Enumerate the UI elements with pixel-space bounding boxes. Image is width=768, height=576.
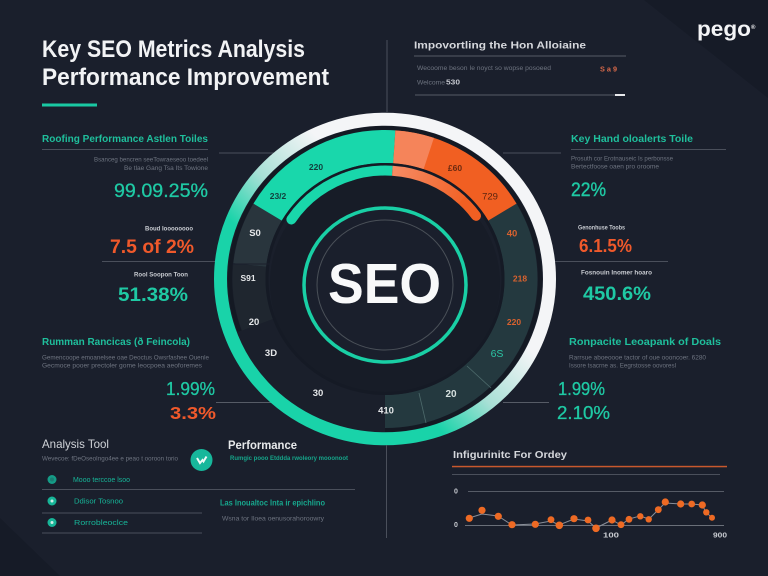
text block: right top (571, 155, 673, 170)
thin inner ring (317, 220, 453, 350)
panel: line chart (452, 449, 727, 540)
panel: left metric column (42, 134, 279, 306)
dial numbers: 30 (313, 388, 323, 399)
title (42, 36, 329, 106)
outer ring (220, 119, 550, 439)
panel: top improvement note: 530 (446, 80, 460, 86)
dial numbers: 23/2 (270, 191, 287, 201)
logo: pego (697, 18, 751, 41)
panel: right lower metrics (503, 337, 721, 423)
text block: right lower: Issore tsacrne as. Eegrstosse oovoresl (569, 362, 677, 369)
text block: left top: Bsanceg bencren seeTowraeseoo toedeel (94, 156, 209, 164)
metric: 450.6% (581, 269, 652, 305)
chart axis labels: 100 (603, 532, 619, 540)
dial segments (230, 128, 540, 430)
heading: analysis tool: Analysis Tool (42, 437, 109, 451)
dial numbers: 218 (513, 274, 527, 284)
list row 3: Rorrobleoclce (74, 518, 128, 527)
list row 2 (48, 496, 123, 506)
dial numbers: S91 (240, 273, 256, 283)
SEO label: SEO (328, 252, 441, 316)
text block: performance: Rumgic pooo Etddda rwoleory mooonoot (230, 455, 349, 462)
text block: right top: Bertectfoose oaen pro oroome (571, 163, 659, 170)
metric: 2.10%: 2.10% (557, 403, 610, 423)
metric: 1.99% right: 1.99% (558, 379, 605, 399)
panel: right metric column (503, 134, 726, 305)
metric: 6.1.5%: 6.1.5% (579, 236, 632, 256)
dial numbers: £60 (448, 163, 462, 173)
metric: 3.3%: 3.3% (170, 403, 217, 423)
panel: top improvement note: Wecoome beson Ie noyct so wopse posoeed (417, 65, 551, 72)
dial numbers: 410 (378, 406, 394, 416)
panel: analysis tool (42, 437, 355, 534)
dial base (227, 126, 543, 432)
chart line (469, 503, 712, 528)
dial dividers (419, 366, 491, 423)
metric: 51.38%: 51.38% (118, 285, 188, 306)
dial numbers: 220 (507, 317, 521, 327)
metric: 6.1.5%: Genonhuse Toobs (578, 224, 625, 231)
chart gridlines (465, 491, 724, 526)
icon: teal check badge (190, 449, 212, 471)
metric: 51.38%: Rool Soopon Toon (134, 271, 188, 278)
dial numbers: 220 (309, 162, 323, 172)
heading: left top: Roofing Performance Astlen Toiles (42, 134, 208, 145)
title: Performance Improvement (42, 64, 329, 91)
text block: left top: Be tlae Gang Tsa Its Towione (124, 165, 208, 172)
metric: 450.6%: Fosnouin Inomer hoaro (581, 269, 652, 276)
callout: performance note: Las Inoualtoc Inta ir epichlino (220, 498, 325, 508)
dial numbers: 6S (491, 348, 503, 360)
text block: right lower: Rarrsue aboeoooe tactor of oue oooncoer. 6280 (569, 354, 706, 361)
text block: left top (94, 156, 209, 172)
panel: performance (220, 438, 349, 522)
chart points (466, 498, 715, 532)
metric: 1.99%: 1.99% (166, 379, 215, 399)
metric: 51.38% (118, 271, 188, 306)
text block: right lower (569, 354, 706, 369)
heading: left lower: Rumman Rancicas (ð Feincola) (42, 336, 190, 348)
dial numbers: 20 (249, 317, 259, 328)
panel: top improvement note: Welcome (417, 80, 445, 86)
logo: ® (751, 24, 756, 31)
panel: top improvement note: S a 9 (600, 66, 617, 74)
dial numbers: 40 (507, 228, 517, 240)
text block: right top: Prosuth cor Erotnauseic Is perbonsse (571, 155, 673, 162)
inner disc (270, 173, 500, 393)
metric: 7.5 of 2% (110, 225, 194, 258)
text block: left lower: Gecmoce pooer prectoler gome Ieocpoea aeoforemes (42, 362, 203, 369)
metric: 7.5 of 2%: Boud Ioooooooo (145, 225, 193, 232)
title: Key SEO Metrics Analysis (42, 36, 305, 63)
inner green ring (304, 208, 466, 362)
heading: right top: Key Hand oloalerts Toile (571, 134, 693, 145)
chart axis labels: 0 (454, 488, 458, 496)
chart axis labels (454, 488, 727, 540)
text block: analysis tool: Wevecoe: fDeOseoIngo4ee e peao t ooroon torio (42, 455, 178, 462)
metric: 7.5 of 2%: 7.5 of 2% (110, 237, 194, 258)
list row 1 (48, 475, 130, 484)
metric: 99.09.25%: 99.09.25% (114, 180, 208, 202)
metric: 6.1.5% (578, 224, 632, 256)
callout: performance note (220, 498, 325, 522)
callout: performance note: Wsna tor Iloea oenusorahoroowry (222, 515, 325, 522)
list row 3 (48, 518, 128, 527)
panel: top improvement note (386, 40, 626, 112)
text block: left lower: Gemencoope emoanelsee oae Deoctus Owsrfashee Ouenle (42, 354, 209, 361)
dial numbers: S0 (249, 228, 261, 239)
chart axis labels: 0 (454, 522, 458, 529)
list row 2: Ddisor Tosnoo (74, 496, 123, 506)
panel: left lower metrics (42, 336, 272, 423)
dial numbers: 3D (265, 348, 277, 359)
text block: left lower (42, 354, 209, 369)
panel: SEO dial (220, 119, 550, 439)
chart axis labels: 900 (713, 532, 727, 540)
heading: right lower: Ronpacite Leoapank of Doals (569, 337, 721, 348)
list row 1: Mooo terccoe lsoo (73, 475, 130, 484)
dial numbers (240, 162, 527, 416)
dial numbers: 20 (445, 389, 457, 400)
panel: top improvement note: Impovortling the Hon Alloiaine (414, 40, 586, 52)
heading: performance: Performance (228, 438, 297, 452)
metric: 22%: 22% (571, 180, 606, 201)
dial numbers: 729 (482, 192, 498, 202)
metric: 450.6%: 450.6% (583, 284, 651, 305)
heading: chart: Infigurinitc For Ordey (453, 449, 567, 461)
